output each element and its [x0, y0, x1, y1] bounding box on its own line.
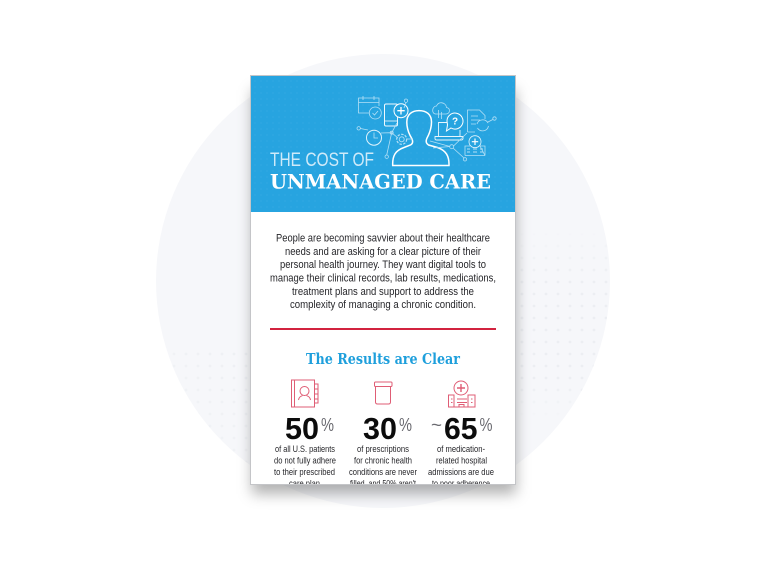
description: of medication- [437, 443, 485, 454]
title line one: THE COST OF [270, 150, 374, 171]
intro paragraph: treatment plans and support to address the [292, 286, 474, 298]
intro paragraph: People are becoming savvier about their healthcare [276, 232, 490, 244]
description: filled, and 50% aren't [350, 478, 416, 488]
number 50: 50 [285, 411, 319, 446]
heading: results: The Results are Clear [306, 350, 461, 368]
card [250, 76, 516, 488]
description [349, 446, 417, 484]
icon: phone with plus [384, 99, 408, 126]
network connector lines [430, 133, 467, 161]
description [274, 446, 336, 484]
description: do not fully adhere [274, 454, 336, 466]
icon: calendar with check [358, 96, 381, 119]
description: to their prescribed [274, 466, 335, 477]
description: care plan [289, 478, 320, 488]
number 65: 65 [444, 411, 478, 446]
intro paragraph: complexity of managing a chronic condition. [290, 299, 476, 311]
percent sign: % [321, 415, 334, 435]
description: of prescriptions [357, 443, 409, 454]
description: of all U.S. patients [275, 443, 335, 454]
description: for chronic health [354, 454, 412, 466]
number 30: 30 [363, 411, 397, 446]
description: conditions are never [349, 466, 417, 477]
description: admissions are due [428, 466, 494, 477]
tilde: ~ [431, 415, 442, 435]
icon: document with refresh [468, 110, 496, 132]
icon: laptop with question bubble: ? [452, 116, 458, 128]
header panel [251, 76, 515, 212]
icon: hospital building [448, 381, 475, 407]
stat column: 50 percent [274, 380, 336, 488]
description: to poor adherence. [432, 478, 492, 488]
title line two: UNMANAGED CARE [270, 170, 491, 194]
stat column: 65 percent [428, 381, 494, 488]
icon: gear [397, 134, 413, 144]
icon: clock and network [357, 123, 398, 158]
intro paragraph: needs and are asking for a clear picture of their [285, 246, 481, 258]
percent sign: % [399, 415, 412, 435]
icon: hospital [465, 136, 485, 156]
description [428, 446, 494, 484]
intro paragraph [270, 232, 496, 311]
icon: cloud with arrows [433, 103, 449, 119]
icon: person silhouette [393, 111, 449, 166]
stat column: 30 percent [349, 382, 417, 488]
card shadow [252, 90, 516, 494]
icon: laptop with question bubble [435, 113, 463, 140]
intro paragraph: personal health journey. They want digital tools to [280, 259, 486, 271]
percent sign: % [480, 415, 492, 435]
background dot pattern [233, 112, 607, 379]
description: related hospital [436, 454, 487, 466]
background circle [156, 54, 610, 508]
icon: address book [292, 380, 318, 407]
intro paragraph: manage their clinical records, lab results, medications, [270, 272, 496, 284]
icon: pill bottle [374, 382, 392, 404]
red divider [270, 328, 496, 330]
